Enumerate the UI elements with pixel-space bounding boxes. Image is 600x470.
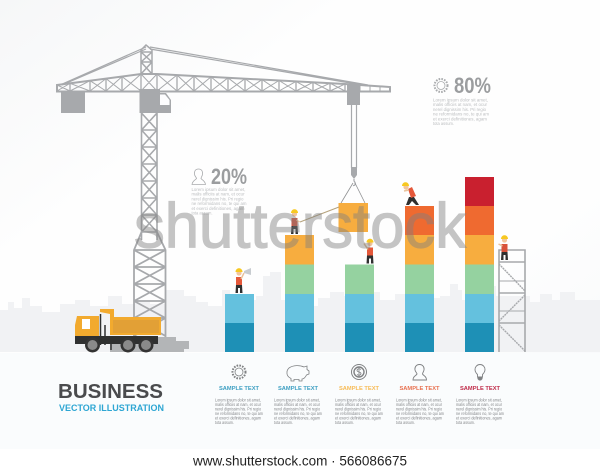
- scaffold: [499, 250, 525, 352]
- body text 4: malis officiis at nam, et ocur: [396, 402, 442, 407]
- body text 5: Lorem ipsum dolor sit amet,: [456, 398, 502, 402]
- watermark: shutterstock: [134, 192, 466, 262]
- column 5 text: light bulb: [456, 364, 504, 425]
- icon: coin: [352, 364, 366, 380]
- stat block 80%: [433, 73, 491, 126]
- truck cab: [75, 316, 99, 337]
- body text 5: [456, 398, 504, 425]
- body text 4: ne reformidans no, te qui am: [396, 411, 444, 416]
- body text 2: et exerci definitiones, agam: [274, 416, 320, 420]
- body text 3: Lorem ipsum dolor sit amet,: [335, 398, 381, 402]
- heading 20%: 20%: [211, 164, 247, 189]
- ground: [0, 353, 600, 449]
- body text 80%: [433, 98, 489, 126]
- body text 5: malis officiis at nam, et ocur: [456, 402, 502, 407]
- sample title 2: SAMPLE TEXT: [278, 386, 319, 392]
- wheels: [85, 338, 154, 352]
- tower crane: [57, 45, 390, 337]
- body text 1: et exerci definitiones, agam: [215, 416, 261, 420]
- footer url: www.shutterstock.com · 566086675: [192, 454, 407, 468]
- body text 3: ne reformidans no, te qui am: [335, 411, 383, 416]
- cab window: [82, 319, 90, 329]
- body text 3: tota assum.: [335, 420, 354, 425]
- sample title 5: SAMPLE TEXT: [460, 386, 501, 392]
- crane counterweight: [61, 92, 85, 113]
- body text 2: ne reformidans no, te qui am: [274, 411, 322, 416]
- body text 20%: [192, 187, 247, 216]
- body text 5: et exerci definitiones, agam: [456, 416, 502, 420]
- body text 1: tota assum.: [215, 420, 234, 425]
- crane cab: [140, 89, 171, 113]
- cab window: [160, 94, 170, 105]
- guide rope: [300, 207, 339, 222]
- worker with megaphone: [236, 268, 251, 293]
- sample title 4: SAMPLE TEXT: [400, 386, 440, 392]
- crane trolley: [347, 85, 360, 105]
- heading 80%: 80%: [454, 73, 491, 98]
- body text 20%: tota assum.: [192, 210, 212, 216]
- icon: person: [413, 364, 426, 380]
- body text 2: [274, 398, 322, 425]
- bar column 2: [285, 235, 314, 352]
- body text 1: nerel dignissim his. Pri regio: [215, 406, 261, 412]
- sample title 1: SAMPLE TEXT: [219, 386, 260, 392]
- body text 1: [215, 398, 263, 425]
- hanging block: [338, 203, 368, 232]
- body text 4: et exerci definitiones, agam: [396, 416, 442, 420]
- column 4 text: person: [396, 364, 444, 425]
- body text 80%: et exerci definitiones, agam: [433, 116, 487, 121]
- bar column 1: [225, 294, 254, 352]
- hook: [351, 167, 357, 186]
- body text 2: malis officiis at nam, et ocur: [274, 402, 320, 407]
- body text 20%: malis officiis at nam, et ocur: [192, 192, 245, 197]
- body text 3: et exerci definitiones, agam: [335, 416, 381, 420]
- body text 80%: tota assum.: [433, 121, 454, 126]
- icon: light bulb: [475, 364, 485, 380]
- body text 20%: nerel dignissim his. Pri regio: [192, 196, 244, 201]
- body text 80%: ne reformidans no, te qui am: [433, 112, 489, 117]
- body text 80%: nerel dignissim his. Pri regio: [433, 107, 486, 112]
- worker pulling rope: [291, 209, 300, 234]
- icon: gear: [232, 366, 246, 378]
- body text 1: Lorem ipsum dolor sit amet,: [215, 398, 261, 402]
- body text 80%: malis officiis at nam, et ocur: [433, 102, 487, 107]
- crane lower mast: [134, 232, 166, 337]
- bar column 5: [465, 177, 494, 352]
- icon: person: [192, 169, 206, 184]
- bar column 3: [345, 264, 374, 352]
- exhaust: [100, 314, 111, 350]
- crane base: [110, 337, 189, 352]
- body text 2: nerel dignissim his. Pri regio: [274, 406, 320, 412]
- subtitle: VECTOR ILLUSTRATION: [59, 403, 164, 413]
- stat block 20%: [192, 164, 247, 216]
- body text 1: malis officiis at nam, et ocur: [215, 402, 261, 407]
- body text 5: nerel dignissim his. Pri regio: [456, 406, 502, 412]
- title BUSINESS: BUSINESS: [58, 380, 163, 403]
- worker on scaffold: [498, 235, 508, 260]
- body text 4: Lorem ipsum dolor sit amet,: [396, 398, 442, 402]
- worker pushing block: [402, 182, 419, 205]
- body text 2: tota assum.: [274, 420, 293, 425]
- body text 5: tota assum.: [456, 420, 475, 425]
- sling: [341, 183, 365, 203]
- body text 3: malis officiis at nam, et ocur: [335, 402, 381, 407]
- chassis: [75, 336, 158, 344]
- hoist cable: [352, 105, 356, 168]
- body text 5: ne reformidans no, te qui am: [456, 411, 504, 416]
- column 3 text: coin: [335, 364, 383, 425]
- body text 3: nerel dignissim his. Pri regio: [335, 406, 381, 412]
- body text 20%: Lorem ipsum dolor sit amet,: [192, 187, 246, 192]
- dump bed: [100, 309, 161, 335]
- body text 20%: et exerci definitiones, agam: [192, 206, 245, 211]
- column 1 text: gear: [215, 366, 263, 425]
- icon: piggy bank: [287, 366, 309, 381]
- body text 4: tota assum.: [396, 420, 415, 425]
- body text 4: [396, 398, 444, 425]
- bar column 4: [405, 206, 434, 352]
- crane jib: [57, 74, 390, 92]
- column 2 text: piggy bank: [274, 366, 322, 425]
- crane top mast: [141, 45, 152, 74]
- icon: gear: [434, 79, 448, 92]
- crane stay cables: [60, 47, 368, 86]
- crane upper mast: [142, 113, 157, 240]
- city skyline: [0, 272, 600, 352]
- body text 20%: ne reformidans no, te qui am: [192, 201, 247, 206]
- bed panel: [113, 320, 159, 333]
- sample title 3: SAMPLE TEXT: [339, 386, 380, 392]
- body text 1: ne reformidans no, te qui am: [215, 411, 263, 416]
- worker on middle bar: [364, 239, 374, 264]
- body text 3: [335, 398, 383, 425]
- body text 80%: Lorem ipsum dolor sit amet,: [433, 98, 488, 102]
- dump truck: [75, 309, 161, 352]
- body text 4: nerel dignissim his. Pri regio: [396, 406, 442, 412]
- body text 2: Lorem ipsum dolor sit amet,: [274, 398, 320, 402]
